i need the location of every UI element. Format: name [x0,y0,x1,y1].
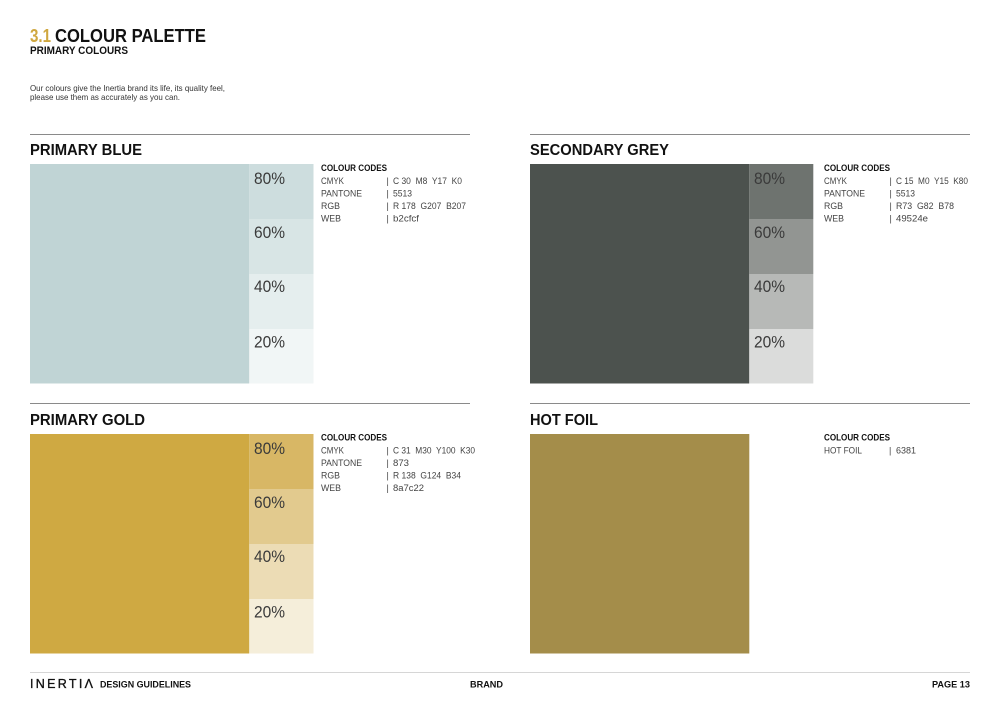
colour codes: secondary grey: CMYK [824,176,847,186]
colour codes: primary gold: C 31 M30 Y100 K30 [393,446,475,456]
tints: secondary grey: 40% [754,278,785,296]
footer: design guidelines: DESIGN GUIDELINES [100,680,191,690]
colour codes: primary gold: WEB [321,483,341,493]
colour codes: primary blue: COLOUR CODES [321,163,387,173]
intro text: Our colours give the Inertia brand its life, its quality feel, [30,84,225,93]
colour codes: hot foil: HOT FOIL [824,446,862,456]
colour codes: secondary grey: | [890,188,892,198]
title: COLOUR PALETTE [55,26,206,46]
panel: secondary grey [530,134,970,384]
swatch: secondary grey [530,164,749,384]
colour codes: secondary grey: | [890,201,892,211]
tints: primary blue: 40% [254,278,285,296]
colour codes: primary blue: CMYK [321,176,344,186]
colour codes: primary blue [321,163,466,224]
colour codes: primary gold: | [386,483,389,493]
tints: primary blue: 20% [254,334,285,352]
colour codes: primary gold: COLOUR CODES [321,433,387,443]
tints: primary blue [249,164,314,384]
heading: hot foil: HOT FOIL [530,412,598,429]
colour codes: primary blue: PANTONE [321,188,362,198]
colour codes: secondary grey [824,163,968,224]
colour codes: primary blue: | [386,188,389,198]
heading: primary blue: PRIMARY BLUE [30,142,142,159]
colour codes: hot foil [824,433,916,456]
panel: primary blue [30,134,470,384]
swatch: primary blue [30,164,249,384]
footer [30,672,970,691]
tints: secondary grey: 20% [754,334,785,352]
tints: secondary grey: 60% [754,224,785,242]
colour codes: primary gold: 873 [393,458,409,468]
tints: primary gold: 60% [254,494,285,512]
colour codes: secondary grey: 5513 [896,188,915,198]
colour codes: primary gold: CMYK [321,446,344,456]
colour codes: primary gold: 8a7c22 [393,483,424,493]
colour codes: secondary grey: PANTONE [824,188,865,198]
colour codes: primary gold: R 138 G124 B34 [393,471,461,481]
panel: primary gold [30,403,475,654]
heading: primary gold: PRIMARY GOLD [30,412,145,429]
title: 3.1 [30,26,51,46]
colour codes: secondary grey: COLOUR CODES [824,163,890,173]
colour codes: primary blue: C 30 M8 Y17 K0 [393,176,462,186]
swatch: hot foil [530,434,749,654]
colour codes: primary blue: RGB [321,201,340,211]
colour codes: secondary grey: RGB [824,201,843,211]
subtitle: PRIMARY COLOURS [30,45,128,57]
colour codes: primary blue: WEB [321,214,341,224]
colour codes: primary gold: PANTONE [321,458,362,468]
colour codes: secondary grey: 49524e [896,214,928,224]
panel: hot foil [530,403,970,654]
logo: inertia: INERTIΛ [30,677,94,691]
colour codes: primary gold: | [386,458,389,468]
tints: primary gold: 80% [254,440,285,458]
colour codes: secondary grey: WEB [824,214,844,224]
footer: page number: PAGE 13 [932,680,970,690]
colour codes: primary gold [321,433,475,493]
tints: primary blue: 80% [254,170,285,188]
intro text: please use them as accurately as you can. [30,93,180,102]
tints: secondary grey [749,164,813,384]
colour codes: primary gold: RGB [321,471,340,481]
tints: primary gold: 40% [254,548,285,566]
colour codes: secondary grey: | [890,176,892,186]
tints: secondary grey: 80% [754,170,785,188]
colour codes: secondary grey: R73 G82 B78 [896,201,954,211]
tints: primary blue: 60% [254,224,285,242]
colour codes: primary gold: | [386,446,389,456]
colour codes: hot foil: | [889,446,891,456]
colour codes: primary blue: | [386,176,389,186]
footer: section: BRAND [470,680,503,690]
heading: secondary grey: SECONDARY GREY [530,142,670,159]
colour codes: hot foil: COLOUR CODES [824,433,890,443]
colour codes: secondary grey: C 15 M0 Y15 K80 [896,176,968,186]
colour codes: primary blue: | [386,214,389,224]
colour codes: primary blue: 5513 [393,188,412,198]
tints: primary gold: 20% [254,604,285,622]
colour codes: secondary grey: | [890,214,892,224]
colour codes: primary blue: | [386,201,389,211]
colour codes: primary blue: R 178 G207 B207 [393,201,466,211]
tints: primary gold [249,434,314,654]
intro text [30,84,225,102]
colour codes: primary blue: b2cfcf [393,214,420,224]
colour codes: primary gold: | [386,471,389,481]
colour codes: hot foil: 6381 [896,446,916,456]
swatch: primary gold [30,434,249,654]
